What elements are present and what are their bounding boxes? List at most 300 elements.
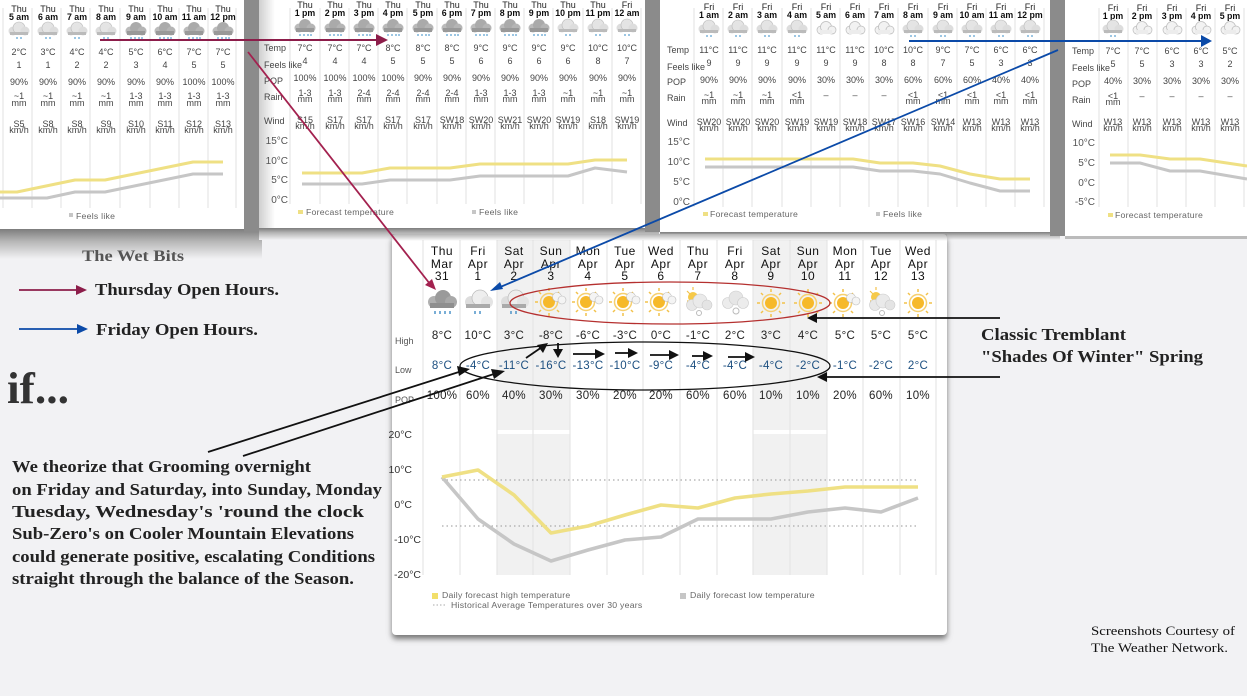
- panel: Thursday morning hourly forecast: mm: [12, 98, 26, 108]
- panel: Friday morning hourly forecast: mm: [964, 96, 980, 106]
- paragraph: grooming theory: Tuesday, Wednesday's 'round the clock: [12, 502, 365, 521]
- day headers: Mon: [833, 244, 857, 258]
- panel: Friday morning hourly forecast: Temp: [667, 45, 689, 55]
- POP values: 60%: [466, 390, 490, 402]
- panel: Friday morning hourly forecast: W13: [1021, 117, 1039, 127]
- panel: Friday morning hourly forecast: 90%: [788, 75, 806, 85]
- high temperatures: 2°C: [725, 330, 745, 342]
- panel: Thursday morning hourly forecast: 3°C: [40, 47, 56, 57]
- panel: Friday morning hourly forecast: Fri: [792, 2, 802, 12]
- arrow: Friday to forecast: [490, 50, 1058, 291]
- panel: Thursday morning hourly forecast: 2°C: [11, 47, 27, 57]
- panel: Friday morning hourly forecast: 9: [852, 58, 858, 68]
- panel: Friday afternoon hourly forecast: 10°C: [1073, 138, 1095, 149]
- panel: Thursday afternoon hourly forecast: mm: [444, 94, 460, 104]
- panel: Thursday morning hourly forecast: 5°C: [128, 47, 144, 57]
- panel: Friday morning hourly forecast: 12 pm: [1017, 10, 1043, 20]
- POP values: [427, 390, 930, 402]
- panel: Friday afternoon hourly forecast: 40%: [1104, 76, 1122, 86]
- day headers: Sun: [540, 244, 562, 258]
- panel: Thursday afternoon hourly forecast: 12 am: [615, 8, 640, 18]
- day headers: 1: [474, 269, 482, 283]
- panel: Thursday afternoon hourly forecast: 9°C: [502, 43, 518, 53]
- panel: Thursday afternoon hourly forecast: 100%: [352, 73, 376, 83]
- panel: Thursday morning hourly forecast: 1: [16, 60, 22, 70]
- weekend shading: [497, 240, 827, 575]
- day headers: Apr: [688, 257, 708, 271]
- panel: Friday morning hourly forecast: km/h: [933, 123, 953, 133]
- POP values: 60%: [869, 390, 893, 402]
- panel: Friday afternoon hourly forecast: Feels like: [1072, 63, 1110, 73]
- panel: Friday morning hourly forecast: –: [852, 90, 858, 100]
- panel: Friday morning hourly forecast: 90%: [729, 75, 747, 85]
- panel: Friday morning hourly forecast: Fri: [762, 2, 772, 12]
- day headers: Apr: [798, 257, 818, 271]
- arrow: Thursday to forecast: [248, 52, 436, 290]
- day headers: Apr: [871, 257, 891, 271]
- panel: Thursday morning hourly forecast: km/h: [213, 125, 233, 135]
- panel: Friday morning hourly forecast: km/h: [903, 123, 923, 133]
- panel: Friday morning hourly forecast: 11°C: [728, 45, 748, 55]
- panel: Friday afternoon hourly forecast: Fri: [1167, 3, 1177, 13]
- panel: Thursday afternoon hourly forecast: Wind: [264, 116, 285, 126]
- panel: Thursday afternoon hourly forecast: mm: [356, 94, 372, 104]
- panel: Thursday afternoon hourly forecast: 5°C: [271, 175, 288, 186]
- panel: Friday afternoon hourly forecast: Temp: [1072, 46, 1094, 56]
- panel: Thursday morning hourly forecast: 7°C: [215, 47, 231, 57]
- day headers: Wed: [648, 244, 674, 258]
- low temperatures: -2°C: [796, 360, 820, 372]
- panel: Thursday afternoon hourly forecast: 2-4: [357, 88, 371, 98]
- panel: Friday morning hourly forecast: 90%: [758, 75, 776, 85]
- panel: Thursday morning hourly forecast: 8 am: [96, 12, 116, 22]
- low temperatures: -4°C: [686, 360, 710, 372]
- panel: Thursday afternoon hourly forecast: 10°C: [266, 156, 288, 167]
- panel: Thursday afternoon hourly forecast: Thu: [444, 0, 460, 10]
- panel: Thursday morning hourly forecast: 6°C: [157, 47, 173, 57]
- panel: Friday morning hourly forecast: 10°C: [903, 45, 924, 55]
- panel: Friday morning hourly forecast: 15°C: [668, 137, 690, 148]
- credit text: [1091, 623, 1236, 655]
- panel: Friday afternoon hourly forecast: 1 pm: [1103, 11, 1123, 21]
- panel: Thursday morning hourly forecast: mm: [40, 98, 56, 108]
- panel: Thursday morning hourly forecast: 12 pm: [210, 12, 236, 22]
- panel: Friday afternoon hourly forecast: 30%: [1221, 76, 1239, 86]
- chart legend: Historical Average Temperatures over 30 years: [451, 600, 643, 610]
- panel: Thursday afternoon hourly forecast: 90%: [618, 73, 636, 83]
- low temperatures: -1°C: [833, 360, 857, 372]
- panel: Thursday afternoon hourly forecast: 7 pm: [471, 8, 491, 18]
- panel: Friday morning hourly forecast: 60%: [963, 75, 981, 85]
- panel: Friday morning hourly forecast: 3: [1027, 58, 1033, 68]
- panel: Friday morning hourly forecast: 30%: [817, 75, 835, 85]
- day headers: Apr: [615, 257, 635, 271]
- panel: Thursday morning hourly forecast: 100%: [182, 77, 206, 87]
- panel: Thursday morning hourly forecast: ~1: [43, 91, 53, 101]
- panel: Thursday morning hourly forecast: km/h: [126, 125, 146, 135]
- panel: Thursday afternoon hourly forecast: 2-4: [416, 88, 430, 98]
- day headers: Apr: [761, 257, 781, 271]
- panel: Thursday morning hourly forecast: [0, 0, 262, 259]
- panel: Thursday afternoon hourly forecast: SW20: [527, 115, 551, 125]
- panel: Friday afternoon hourly forecast: 2: [1227, 59, 1233, 69]
- panel: Thursday afternoon hourly forecast: 100%: [381, 73, 405, 83]
- high temperature line: [442, 470, 918, 533]
- panel: Thursday morning hourly forecast: mm: [98, 98, 114, 108]
- panel: Thursday afternoon hourly forecast: 15°C: [266, 136, 288, 147]
- panel: Thursday afternoon hourly forecast: km/h: [325, 121, 345, 131]
- panel: Friday morning hourly forecast: mm: [906, 96, 920, 106]
- panel: Friday afternoon hourly forecast: km/h: [1132, 123, 1152, 133]
- panel: Friday morning hourly forecast: 8 am: [903, 10, 923, 20]
- panel: Friday afternoon hourly forecast: km/h: [1162, 123, 1182, 133]
- panel: Thursday afternoon hourly forecast: ~1: [593, 88, 603, 98]
- panel: Friday afternoon hourly forecast: 6°C: [1193, 46, 1209, 56]
- panel: Thursday afternoon hourly forecast: 10 pm: [555, 8, 581, 18]
- panel: Friday morning hourly forecast: 7°C: [964, 45, 980, 55]
- panel: Friday afternoon hourly forecast: -5°C: [1075, 197, 1095, 208]
- day headers: 2: [510, 269, 518, 283]
- panel: Thursday morning hourly forecast: 7 am: [67, 12, 87, 22]
- day headers: Apr: [504, 257, 524, 271]
- panel: Friday morning hourly forecast: 11°C: [699, 45, 719, 55]
- POP values: 100%: [427, 390, 457, 402]
- panel: Thursday afternoon hourly forecast: 2-4: [386, 88, 400, 98]
- panel: Friday morning hourly forecast: km/h: [787, 123, 807, 133]
- panel: Thursday morning hourly forecast: Thu: [157, 4, 173, 14]
- red ellipse highlight: [510, 282, 830, 324]
- panel: Thursday morning hourly forecast: Thu: [128, 4, 144, 14]
- panel: Friday afternoon hourly forecast: –: [1169, 91, 1175, 101]
- panel: Friday morning hourly forecast: 11°C: [787, 45, 807, 55]
- panel: Friday morning hourly forecast: 11°C: [816, 45, 836, 55]
- panel: Friday morning hourly forecast: 11°C: [845, 45, 865, 55]
- panel: Friday afternoon hourly forecast: km/h: [1103, 123, 1123, 133]
- black ellipse highlight: [460, 342, 830, 390]
- panel: Friday afternoon hourly forecast: W13: [1163, 117, 1181, 127]
- panel: Friday morning hourly forecast: 40%: [1021, 75, 1039, 85]
- panel: Thursday afternoon hourly forecast: ~1: [622, 88, 632, 98]
- panel: Friday afternoon hourly forecast: 5: [1110, 59, 1116, 69]
- panel: Thursday afternoon hourly forecast: ~1: [563, 88, 573, 98]
- panel: Friday afternoon hourly forecast: 5 pm: [1220, 11, 1240, 21]
- panel: Thursday morning hourly forecast: mm: [216, 98, 230, 108]
- panel: Thursday afternoon hourly forecast: Thu: [297, 0, 313, 10]
- weather icons: [428, 287, 932, 317]
- panel: Friday morning hourly forecast: Fri: [1025, 2, 1035, 12]
- panel: Friday morning hourly forecast: Fri: [938, 2, 948, 12]
- panel: Thursday afternoon hourly forecast: mm: [474, 94, 488, 104]
- small black trend arrows: [526, 343, 755, 362]
- panel: Thursday afternoon hourly forecast: 1-3: [328, 88, 342, 98]
- panel: Friday morning hourly forecast: SW20: [726, 117, 750, 127]
- day headers: Tue: [870, 244, 892, 258]
- historical average lines: [442, 480, 916, 526]
- panel: Friday afternoon hourly forecast: –: [1139, 91, 1145, 101]
- POP values: 60%: [686, 390, 710, 402]
- row labels: Low: [395, 365, 412, 375]
- high temperatures: [432, 330, 928, 342]
- panel: Thursday afternoon hourly forecast: Thu: [502, 0, 518, 10]
- panel: Thursday morning hourly forecast: 2: [74, 60, 80, 70]
- panel: Thursday morning hourly forecast: 5: [220, 60, 226, 70]
- high temperatures: 4°C: [798, 330, 818, 342]
- panel: Friday morning hourly forecast: 90%: [700, 75, 718, 85]
- panel: Thursday morning hourly forecast: km/h: [184, 125, 204, 135]
- black arrows to ellipse: [208, 366, 505, 456]
- panel: Thursday afternoon hourly forecast: 100%: [323, 73, 347, 83]
- panel: Thursday afternoon hourly forecast: 7°C: [356, 43, 372, 53]
- panel: Friday morning hourly forecast: Fri: [821, 2, 831, 12]
- panel: Thursday morning hourly forecast: km/h: [155, 125, 175, 135]
- high temperatures: 10°C: [465, 330, 491, 342]
- panel: Thursday morning hourly forecast: 5: [191, 60, 197, 70]
- arrow: Friday hours horizontal: [909, 35, 1212, 47]
- panel: Friday morning hourly forecast: SW20: [697, 117, 721, 127]
- panel: Friday morning hourly forecast: km/h: [816, 123, 836, 133]
- panel: Thursday afternoon hourly forecast: Thu: [415, 0, 431, 10]
- panel: Thursday morning hourly forecast: 11 am: [182, 12, 206, 22]
- day headers: [431, 244, 931, 283]
- panel: Friday afternoon hourly forecast: W13: [1221, 117, 1239, 127]
- panel: Thursday afternoon hourly forecast: 7°C: [327, 43, 343, 53]
- panel: Friday morning hourly forecast: W13: [963, 117, 981, 127]
- panel: Friday afternoon hourly forecast: 3: [1198, 59, 1204, 69]
- panel: Friday morning hourly forecast: 6°C: [993, 45, 1009, 55]
- low temperatures: [432, 360, 928, 372]
- panel: Thursday afternoon hourly forecast: 8°C: [444, 43, 460, 53]
- panel: Friday morning hourly forecast: POP: [667, 77, 686, 87]
- panel: Thursday afternoon hourly forecast: S17: [415, 115, 431, 125]
- panel: Friday morning hourly forecast: 10°C: [668, 157, 690, 168]
- panel: Friday morning hourly forecast: Fri: [850, 2, 860, 12]
- day headers: Apr: [578, 257, 598, 271]
- paragraph: grooming theory: on Friday and Saturday, into Sunday, Monday: [12, 480, 383, 499]
- panel: Thursday afternoon hourly forecast: 10°C: [588, 43, 609, 53]
- chart axis: -20°C: [394, 569, 421, 581]
- panel: Thursday afternoon hourly forecast: 6: [565, 56, 571, 66]
- low temperature line: [442, 477, 918, 561]
- panel: Friday afternoon hourly forecast: 3 pm: [1162, 11, 1182, 21]
- panel: Thursday morning hourly forecast: mm: [158, 98, 172, 108]
- panel: Friday morning hourly forecast: <1: [967, 90, 977, 100]
- high temperatures: -8°C: [539, 330, 563, 342]
- paragraph: grooming theory: [12, 457, 383, 588]
- panel: Friday morning hourly forecast: 6°C: [1022, 45, 1038, 55]
- POP values: 20%: [613, 390, 637, 402]
- panel: Friday afternoon hourly forecast: Rain: [1072, 95, 1091, 105]
- low temperatures: 8°C: [432, 360, 452, 372]
- panel: Thursday afternoon hourly forecast: 5 pm: [413, 8, 433, 18]
- panel: Thursday afternoon hourly forecast: 9°C: [560, 43, 576, 53]
- panel: Thursday afternoon hourly forecast: 90%: [501, 73, 519, 83]
- POP values: 10%: [796, 390, 820, 402]
- panel: Friday morning hourly forecast: SW20: [755, 117, 779, 127]
- panel: Friday morning hourly forecast: km/h: [991, 123, 1011, 133]
- panel: Thursday afternoon hourly forecast: 7°C: [297, 43, 313, 53]
- panel: Thursday afternoon hourly forecast: km/h: [354, 121, 374, 131]
- chart axis: [389, 429, 421, 581]
- high temperatures: 3°C: [761, 330, 781, 342]
- panel: Thursday afternoon hourly forecast: 90%: [530, 73, 548, 83]
- panel: Friday afternoon hourly forecast: 6°C: [1164, 46, 1180, 56]
- panel: Thursday afternoon hourly forecast: Feels like: [479, 207, 518, 217]
- panel: Friday morning hourly forecast: Feels like: [667, 62, 705, 72]
- panel: Thursday morning hourly forecast: Thu: [69, 4, 85, 14]
- panel: Friday morning hourly forecast: mm: [1022, 96, 1038, 106]
- panel: Friday morning hourly forecast: 3 am: [757, 10, 777, 20]
- panel: Thursday morning hourly forecast: 100%: [211, 77, 235, 87]
- high temperatures: 0°C: [651, 330, 671, 342]
- paragraph: grooming theory: Sub-Zero's on Cooler Mountain Elevations: [12, 524, 354, 543]
- panel: Friday morning hourly forecast: <1: [792, 90, 802, 100]
- panel: Friday morning hourly forecast: 30%: [875, 75, 893, 85]
- panel: Thursday afternoon hourly forecast: S17: [327, 115, 343, 125]
- low temperatures: -2°C: [869, 360, 893, 372]
- chart axis: 20°C: [389, 429, 412, 441]
- day headers: Apr: [541, 257, 561, 271]
- panel: Friday morning hourly forecast: 9 am: [933, 10, 953, 20]
- panel: Thursday afternoon hourly forecast: Temp: [264, 43, 286, 53]
- panel: Friday afternoon hourly forecast: km/h: [1220, 123, 1240, 133]
- panel: Friday morning hourly forecast: 9: [764, 58, 770, 68]
- chart axis: 0°C: [394, 499, 412, 511]
- panel: Friday morning hourly forecast: Fri: [733, 2, 743, 12]
- panel: Friday morning hourly forecast: 6 am: [845, 10, 865, 20]
- legend: Thursday: Thursday Open Hours.: [95, 280, 279, 299]
- panel: Thursday afternoon hourly forecast: 4: [302, 56, 308, 66]
- panel: Thursday morning hourly forecast: 1-3: [187, 91, 201, 101]
- panel: Thursday afternoon hourly forecast: Thu: [327, 0, 343, 10]
- panel: Thursday morning hourly forecast: 90%: [127, 77, 145, 87]
- panel: Thursday afternoon hourly forecast: 90%: [559, 73, 577, 83]
- panel: Friday afternoon hourly forecast: Wind: [1072, 119, 1093, 129]
- panel: Friday afternoon hourly forecast: 2 pm: [1132, 11, 1152, 21]
- panel: Thursday afternoon hourly forecast: 4 pm: [383, 8, 403, 18]
- day headers: Wed: [905, 244, 931, 258]
- panel: Friday morning hourly forecast: 60%: [934, 75, 952, 85]
- panel: Thursday morning hourly forecast: 6 am: [38, 12, 58, 22]
- day headers: 6: [657, 269, 665, 283]
- panel: Thursday afternoon hourly forecast: S15: [297, 115, 313, 125]
- panel: Thursday morning hourly forecast: 5 am: [9, 12, 29, 22]
- day headers: Apr: [908, 257, 928, 271]
- panel: Thursday afternoon hourly forecast: km/h: [471, 121, 491, 131]
- day headers: Sat: [504, 244, 524, 258]
- panel: Thursday afternoon hourly forecast: 90%: [443, 73, 461, 83]
- panel: Thursday morning hourly forecast: 1: [45, 60, 51, 70]
- panel: Friday morning hourly forecast: km/h: [757, 123, 777, 133]
- panel: Thursday afternoon hourly forecast: 1-3: [474, 88, 488, 98]
- panel: Thursday morning hourly forecast: S9: [100, 119, 112, 129]
- panel: Thursday morning hourly forecast: Thu: [40, 4, 56, 14]
- panel: Friday afternoon hourly forecast: 7°C: [1134, 46, 1150, 56]
- panel: Thursday morning hourly forecast: S8: [42, 119, 54, 129]
- POP values: 40%: [502, 390, 526, 402]
- panel: Thursday morning hourly forecast: Thu: [186, 4, 202, 14]
- panel: Thursday afternoon hourly forecast: km/h: [588, 121, 608, 131]
- panel: Thursday afternoon hourly forecast: km/h: [529, 121, 549, 131]
- row labels: High: [395, 336, 414, 346]
- panel: Thursday afternoon hourly forecast: km/h: [500, 121, 520, 131]
- day headers: Apr: [468, 257, 488, 271]
- panel: Thursday afternoon hourly forecast: 9°C: [531, 43, 547, 53]
- panel: Friday afternoon hourly forecast: –: [1198, 91, 1204, 101]
- panel: Friday morning hourly forecast: Fri: [996, 2, 1006, 12]
- paragraph: grooming theory: straight through the balance of the Season.: [12, 569, 354, 588]
- panel: Thursday afternoon hourly forecast: Thu: [356, 0, 372, 10]
- chart axis: 10°C: [389, 464, 412, 476]
- day headers: Thu: [431, 244, 453, 258]
- panel: Thursday afternoon hourly forecast: 1-3: [532, 88, 546, 98]
- panel: Friday morning hourly forecast: 0°C: [673, 197, 690, 208]
- panel: Friday afternoon hourly forecast: 7°C: [1105, 46, 1121, 56]
- panel: Thursday morning hourly forecast: ~1: [72, 91, 82, 101]
- panel: Thursday afternoon hourly forecast: 5: [420, 56, 426, 66]
- panel: Thursday afternoon hourly forecast: mm: [620, 94, 634, 104]
- panel: Friday morning hourly forecast: ~1: [762, 90, 772, 100]
- paragraph: grooming theory: We theorize that Grooming overnight: [12, 457, 311, 476]
- panel: Friday morning hourly forecast: –: [881, 90, 887, 100]
- panel: Friday morning hourly forecast: SW16: [901, 117, 925, 127]
- panel: Thursday morning hourly forecast: 3: [133, 60, 139, 70]
- panel: Friday morning hourly forecast: 5: [969, 58, 975, 68]
- panel: Friday morning hourly forecast: mm: [790, 96, 804, 106]
- day headers: Tue: [614, 244, 636, 258]
- panel: Thursday morning hourly forecast: mm: [186, 98, 202, 108]
- day headers: Fri: [470, 244, 486, 258]
- panel: Thursday afternoon hourly forecast: 4: [361, 56, 367, 66]
- panel: Friday morning hourly forecast: km/h: [845, 123, 865, 133]
- panel: Thursday afternoon hourly forecast: 2 pm: [325, 8, 345, 18]
- panel: Thursday morning hourly forecast: Thu: [215, 4, 231, 14]
- arrow: sunny callout: [807, 313, 1000, 323]
- panel: Friday morning hourly forecast: Fri: [704, 2, 714, 12]
- panel: Thursday morning hourly forecast: km/h: [38, 125, 58, 135]
- panel: Thursday afternoon hourly forecast: mm: [590, 94, 606, 104]
- panel: Thursday morning hourly forecast: 4°C: [98, 47, 114, 57]
- panel: Thursday afternoon hourly forecast: Forecast temperature: [306, 207, 394, 217]
- low temperatures: -9°C: [649, 360, 673, 372]
- panel: Thursday afternoon hourly forecast: POP: [264, 76, 283, 86]
- panel: Thursday afternoon hourly forecast: mm: [298, 94, 312, 104]
- day headers: 13: [911, 269, 925, 283]
- panel: Friday morning hourly forecast: SW14: [931, 117, 955, 127]
- POP values: 10%: [759, 390, 783, 402]
- panel: Thursday afternoon hourly forecast: S18: [590, 115, 606, 125]
- low temperatures: -10°C: [609, 360, 641, 372]
- high temperatures: 3°C: [504, 330, 524, 342]
- day headers: Fri: [727, 244, 743, 258]
- chart legend: Daily forecast high temperature: [442, 590, 570, 600]
- panel: Friday morning hourly forecast: km/h: [728, 123, 748, 133]
- day headers: 7: [694, 269, 702, 283]
- panel: Friday morning hourly forecast: Fri: [908, 2, 918, 12]
- panel: Thursday morning hourly forecast: km/h: [67, 125, 87, 135]
- day headers: Sun: [797, 244, 819, 258]
- panel: Friday morning hourly forecast: 2 am: [728, 10, 748, 20]
- panel: Friday morning hourly forecast: 40%: [992, 75, 1010, 85]
- panel: Friday morning hourly forecast: SW17: [872, 117, 896, 127]
- panel: Thursday morning hourly forecast: km/h: [96, 125, 116, 135]
- panel: Friday afternoon hourly forecast: 5: [1139, 59, 1145, 69]
- low temperatures: -4°C: [723, 360, 747, 372]
- legend: Friday: Friday Open Hours.: [96, 320, 258, 339]
- panel: Thursday morning hourly forecast: ~1: [14, 91, 24, 101]
- panel: Friday afternoon hourly forecast: 0°C: [1078, 178, 1095, 189]
- panel: Friday morning hourly forecast: 9°C: [935, 45, 951, 55]
- high temperatures: -6°C: [576, 330, 600, 342]
